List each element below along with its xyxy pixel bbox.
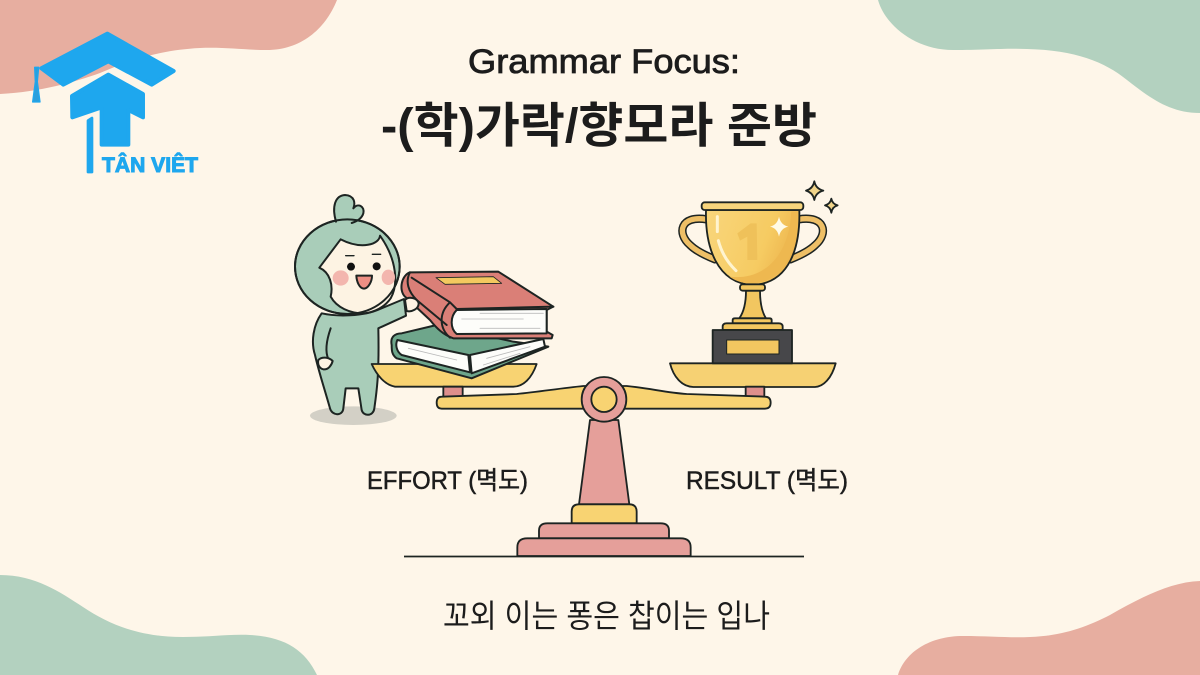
balance scale [372, 363, 836, 556]
red book [401, 272, 553, 338]
icon: graduation cap [33, 34, 174, 172]
decorative blob: bottom right [898, 581, 1200, 675]
trophy collar [740, 284, 765, 291]
right hand [405, 298, 419, 311]
trophy stem [739, 291, 766, 318]
label: result: RESULT (멱도) [686, 467, 848, 495]
green book [391, 325, 548, 378]
cup highlights [717, 217, 736, 271]
sparkle small [825, 199, 838, 213]
logo wordmark: TÂN VIÊT [102, 153, 198, 177]
left hand [318, 358, 333, 369]
left pan [372, 364, 537, 387]
number one on cup [737, 223, 757, 260]
trophy cup [706, 210, 799, 285]
caption: 꼬외 이는 퐁은 찹이는 입나 [443, 598, 770, 634]
ground line [404, 556, 804, 558]
decorative blob: top left [0, 0, 337, 94]
character arm line [326, 328, 331, 359]
cup shading [729, 212, 797, 284]
cup rim [702, 202, 803, 210]
hair tuft [334, 195, 364, 223]
right pan [670, 363, 836, 387]
trophy [682, 181, 838, 363]
sparkle large [806, 181, 823, 200]
cheeks [333, 270, 395, 286]
character body [313, 299, 406, 415]
title: Korean grammar point: -(학)가락/향모라 준방 [381, 100, 817, 153]
character shadow [310, 406, 397, 425]
trophy foot [733, 318, 772, 323]
plinth plate [727, 340, 779, 354]
decorative blob: bottom left [0, 575, 317, 675]
beam, fulcrum and base [437, 377, 771, 556]
head outline [295, 219, 400, 314]
stack of books with hand [391, 272, 553, 378]
eyes and mouth [346, 254, 381, 289]
cup sparkle [770, 217, 788, 237]
trophy handles [682, 219, 823, 259]
decorative blob: top right [878, 0, 1200, 113]
logo: Tan Viet [33, 34, 198, 177]
character [295, 195, 406, 425]
label: effort: EFFORT (멱도) [367, 467, 528, 495]
face [319, 236, 395, 313]
trophy plinth [713, 330, 792, 363]
character head [295, 219, 400, 314]
heading: Grammar Focus: Grammar Focus: [468, 43, 740, 81]
